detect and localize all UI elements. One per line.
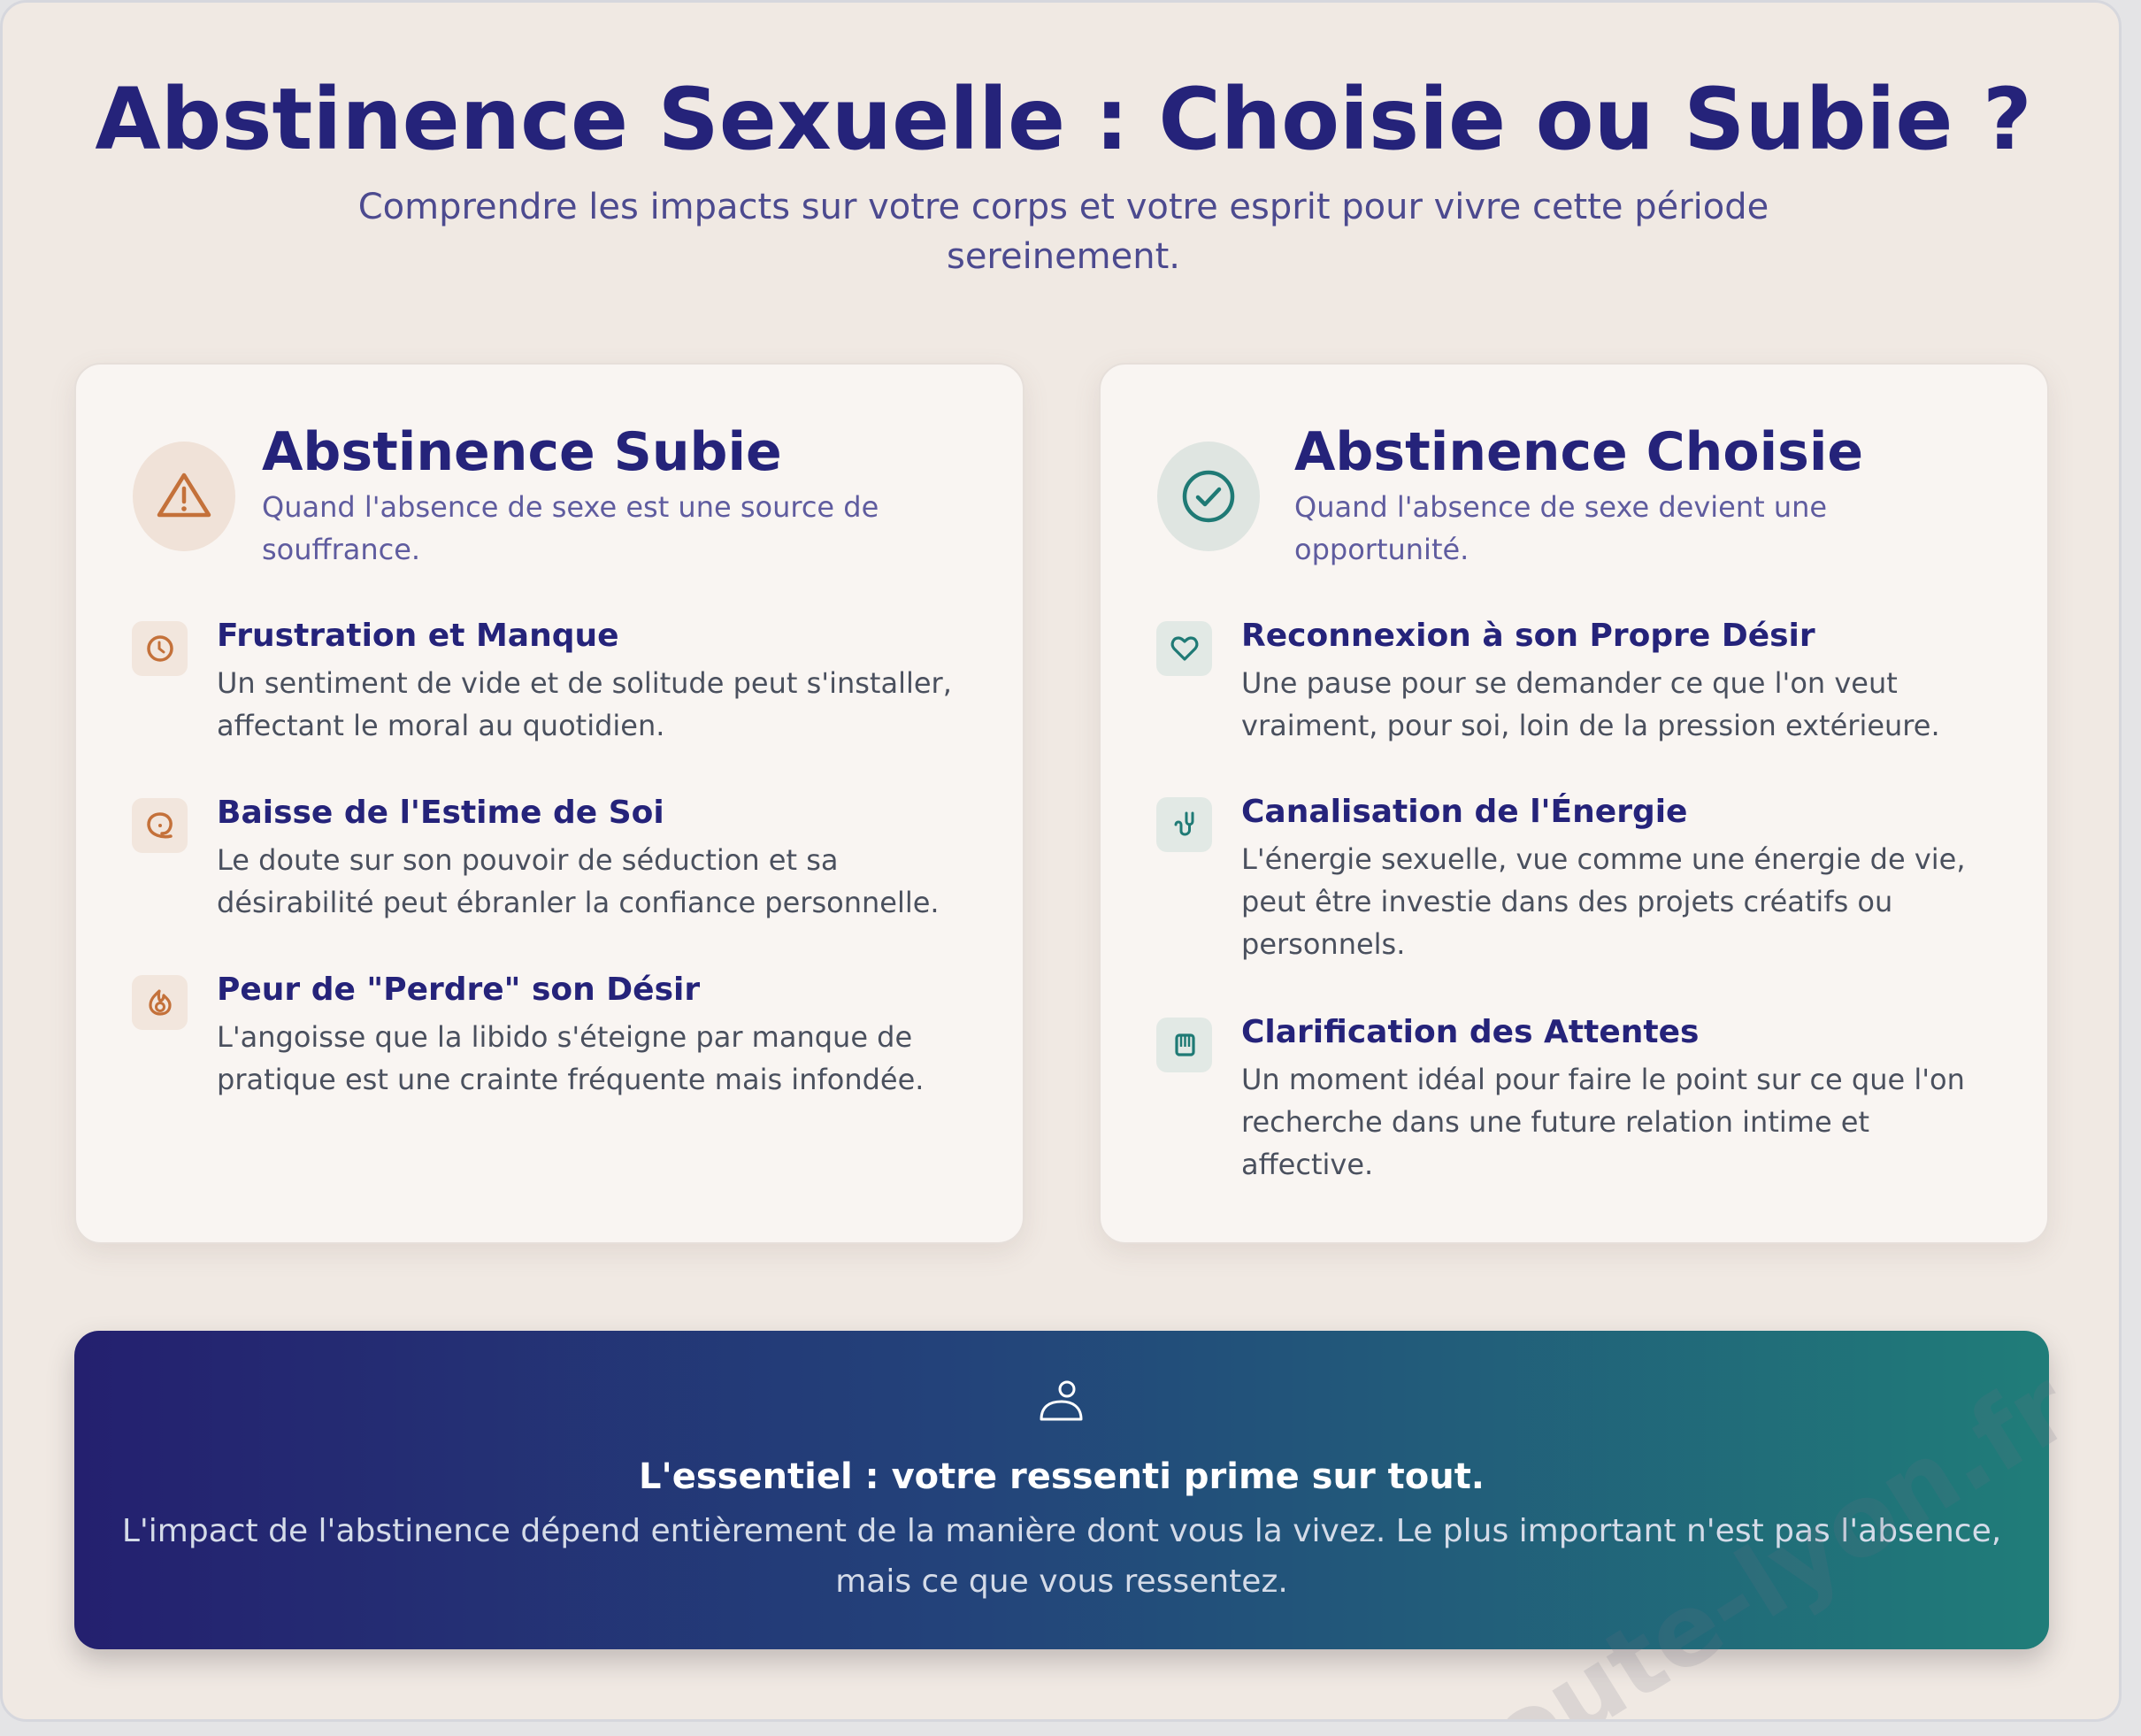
item: estime de soi (132, 795, 940, 919)
item: estime de soi: Baisse de l'Estime de Soi (217, 795, 664, 831)
subtitle: Comprendre les impacts sur votre corps et votre esprit pour vivre cette période (358, 187, 1769, 227)
description: Quand l'absence de sexe devient une (1294, 490, 1827, 524)
item: estime de soi: Le doute sur son pouvoir de séduction et sa (217, 843, 838, 877)
description (1294, 490, 1827, 566)
description: souffrance. (262, 533, 420, 566)
banner heading: L'essentiel : votre ressenti prime sur tout. (639, 1456, 1485, 1497)
item: attentes: Un moment idéal pour faire le point sur ce que l'on (1241, 1063, 1965, 1096)
item: attentes: recherche dans une future relation intime et (1241, 1105, 1869, 1139)
banner text: L'impact de l'abstinence dépend entièrement de la manière dont vous la vivez. Le plus important n'est pas l'absence, (122, 1513, 2001, 1549)
item: peur: L'angoisse que la libido s'éteigne par manque de (217, 1020, 912, 1054)
item: reconnexion: vraiment, pour soi, loin de la pression extérieure. (1241, 709, 1940, 742)
icon: notebook (1156, 1018, 1212, 1072)
item: estime de soi: désirabilité peut ébranler la confiance personnelle. (217, 886, 940, 919)
description: opportunité. (1294, 533, 1469, 566)
item: attentes: Clarification des Attentes (1241, 1014, 1699, 1050)
item: reconnexion: Reconnexion à son Propre Désir (1241, 618, 1815, 654)
panel: abstinence choisie (1099, 363, 2049, 1244)
item: attentes (1156, 1014, 1965, 1181)
title: Abstinence Sexuelle : Choisie ou Subie ? (95, 70, 2032, 169)
heading: Abstinence Choisie (1294, 421, 1863, 483)
item: frustration (132, 618, 952, 742)
item: energie: personnels. (1241, 927, 1405, 961)
subtitle (358, 187, 1769, 277)
item: frustration: Un sentiment de vide et de solitude peut s'installer, (217, 666, 952, 700)
item: attentes: affective. (1241, 1148, 1373, 1181)
icon: warning (133, 442, 235, 551)
item: energie: L'énergie sexuelle, vue comme une énergie de vie, (1241, 842, 1966, 876)
icon: clock (132, 621, 188, 676)
icon: heart (1156, 621, 1212, 676)
description: Quand l'absence de sexe est une source de (262, 490, 879, 524)
subtitle: sereinement. (947, 236, 1180, 277)
banner text (122, 1513, 2001, 1600)
banner text: mais ce que vous ressentez. (835, 1563, 1288, 1600)
item: reconnexion (1156, 618, 1940, 742)
item: reconnexion: Une pause pour se demander ce que l'on veut (1241, 666, 1898, 700)
heading: Abstinence Subie (262, 421, 782, 483)
description (262, 490, 879, 566)
item: energie: peut être investie dans des projets créatifs ou (1241, 885, 1892, 918)
icon: stethoscope (1156, 797, 1212, 852)
item: energie (1156, 793, 1966, 961)
item: frustration: affectant le moral au quotidien. (217, 709, 664, 742)
item: energie: Canalisation de l'Énergie (1241, 794, 1687, 830)
icon: face (132, 798, 188, 853)
item: peur (132, 972, 924, 1096)
item: frustration: Frustration et Manque (217, 618, 619, 654)
icon: check (1157, 442, 1260, 551)
item: peur: pratique est une crainte fréquente mais infondée. (217, 1063, 924, 1096)
icon: person (1040, 1380, 1083, 1421)
banner: l'essentiel (74, 1331, 2049, 1649)
item: peur: Peur de "Perdre" son Désir (217, 972, 700, 1008)
icon: flame (132, 975, 188, 1030)
panel: abstinence subie (74, 363, 1024, 1244)
